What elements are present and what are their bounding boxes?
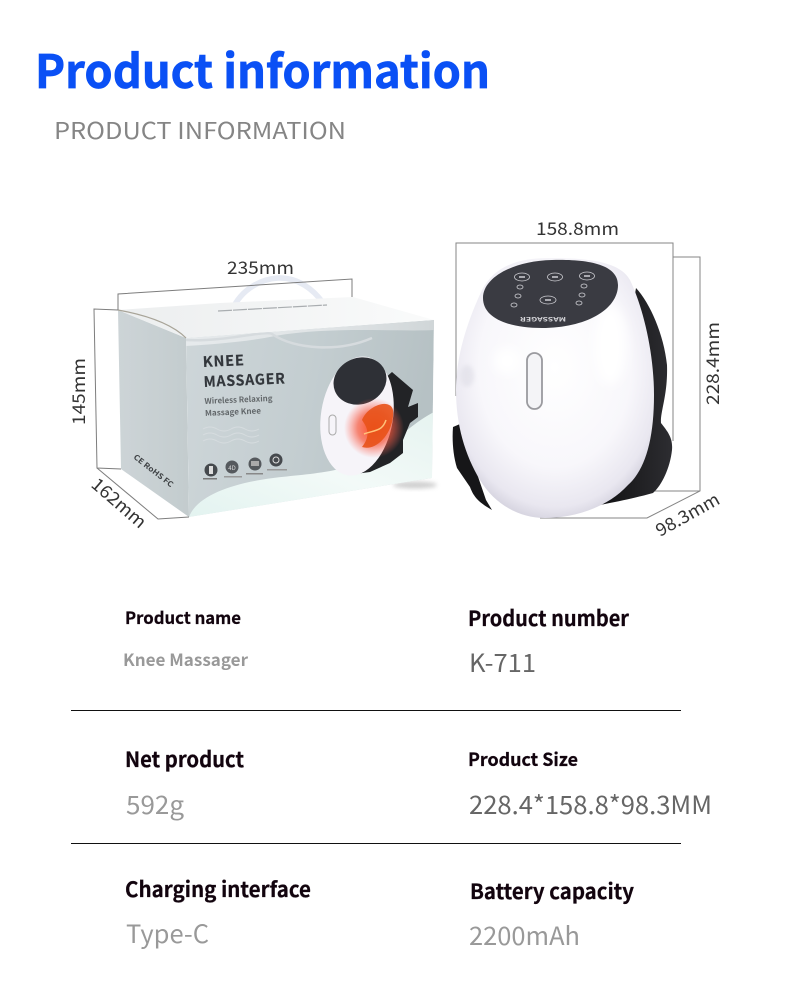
product body [456, 258, 654, 518]
label: box width: 162mm [86, 472, 152, 534]
body highlights [460, 305, 626, 387]
box dimension lines [94, 279, 352, 519]
spec: product name: Knee Massager [123, 647, 249, 671]
spec: charging interface [125, 874, 311, 951]
spec: product number: Product number [468, 603, 630, 633]
mini product image [320, 356, 418, 474]
indicator slot [527, 353, 542, 409]
control panel [483, 260, 618, 328]
panel buttons [511, 272, 594, 307]
box heading [204, 354, 285, 417]
title: Product information [35, 36, 490, 102]
spec: product number: K-711 [469, 644, 536, 680]
box heading: KNEE [202, 349, 245, 372]
spec: net product [125, 744, 244, 822]
spec: product number [468, 603, 630, 680]
box heading: Wireless Relaxing [204, 393, 273, 407]
box wavy marks [203, 427, 259, 443]
label: device width: 158.8mm [536, 216, 619, 241]
spec: charging interface: Type-C [126, 915, 209, 951]
label: device height: 228.4mm [700, 322, 725, 405]
spec: net product: Net product [125, 744, 244, 774]
panel: gift box with dimensions [66, 255, 437, 534]
spec: product size [468, 746, 712, 822]
box heading: MASSAGER [203, 367, 286, 392]
box top face [118, 297, 434, 338]
label: box length: 235mm [227, 255, 294, 280]
box left face [118, 310, 189, 517]
box handle [232, 278, 323, 310]
product strap [453, 288, 672, 510]
spec: battery capacity: 2200mAh [469, 917, 580, 953]
panel: knee massager with dimensions [453, 216, 725, 542]
dimension lines [456, 243, 700, 518]
box front face [186, 320, 434, 517]
box heading: Massage Knee [205, 406, 262, 419]
spec: battery capacity: Battery capacity [470, 876, 634, 906]
infographic page [38, 50, 720, 949]
panel brand text: MASSAGER [520, 315, 566, 324]
box feature icons: 4D [228, 463, 236, 472]
spec: net product: 592g [126, 786, 184, 822]
spec: product name [123, 605, 249, 671]
box certification marks: CE RoHS FC [131, 452, 176, 490]
box feature icons [203, 454, 287, 480]
spec: charging interface: Charging interface [125, 874, 311, 904]
spec: product name: Product name [125, 605, 241, 629]
spec: product size: 228.4*158.8*98.3MM [469, 786, 712, 822]
box shadow [393, 482, 437, 488]
spec: battery capacity [469, 876, 634, 953]
label: device depth: 98.3mm [651, 486, 724, 542]
label: box height: 145mm [66, 358, 91, 425]
subtitle: PRODUCT INFORMATION [54, 112, 346, 146]
spec: product size: Product Size [468, 746, 578, 772]
